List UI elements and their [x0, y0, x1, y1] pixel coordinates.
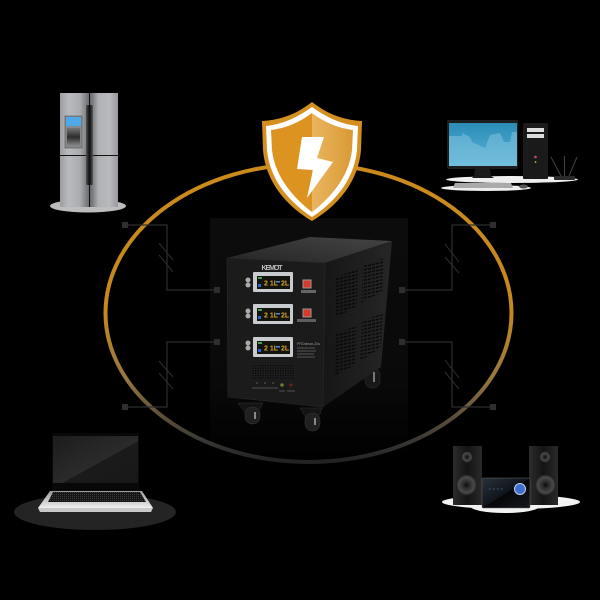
central backdrop panel	[210, 218, 408, 458]
cabinet top	[227, 237, 392, 263]
display 3	[246, 337, 293, 357]
indicator lights	[252, 382, 295, 391]
display 3: 2 1L	[264, 346, 279, 352]
keyboard	[453, 183, 513, 188]
display 2	[246, 304, 293, 324]
right speaker	[529, 446, 558, 505]
spec lines	[297, 348, 316, 357]
display 1: 2L	[281, 280, 290, 288]
display 2: 2 1L	[264, 312, 279, 320]
cabinet side	[323, 241, 392, 407]
shield icon	[262, 102, 362, 221]
voltage stabilizer unit	[227, 237, 392, 431]
side vents	[334, 258, 384, 376]
monitor	[447, 120, 518, 169]
protection ring	[106, 164, 512, 462]
circuit lines right	[399, 222, 496, 410]
front vent grille	[252, 364, 295, 379]
cabinet front	[227, 258, 325, 407]
dispenser	[65, 116, 82, 148]
circuit lines left	[122, 222, 220, 410]
brand: KEMOT	[262, 265, 283, 272]
tower	[523, 123, 548, 179]
display 1: 2 1L	[264, 280, 279, 288]
left speaker	[453, 446, 482, 505]
router	[551, 156, 577, 180]
refrigerator	[50, 93, 126, 212]
lightning bolt	[297, 137, 333, 198]
desktop computer	[441, 120, 578, 191]
laptop	[14, 433, 176, 530]
amplifier	[482, 478, 530, 508]
spec label: PROdmax-20s	[297, 342, 320, 346]
handle	[86, 105, 93, 185]
rear caster	[365, 368, 380, 388]
front left caster	[238, 403, 263, 424]
display 2: 2L	[281, 312, 290, 320]
display 1	[246, 272, 293, 292]
stereo system	[442, 446, 580, 513]
red switch 1	[301, 280, 316, 293]
mouse	[519, 184, 528, 188]
display 3: 2L	[281, 346, 290, 352]
red switch 2	[297, 308, 316, 322]
front right caster	[300, 408, 322, 431]
